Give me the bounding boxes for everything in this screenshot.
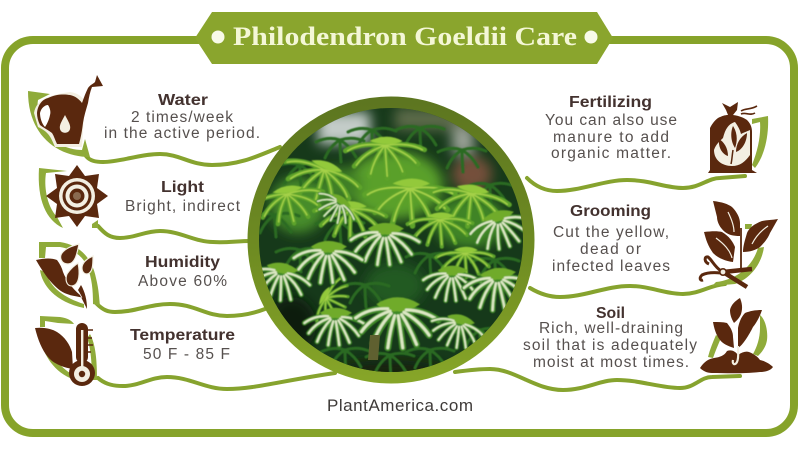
text: light: Light — [161, 179, 205, 196]
text: grooming — [552, 203, 670, 275]
ring — [254, 102, 528, 378]
text: light: Bright, indirect — [125, 198, 241, 215]
text: grooming: infected leaves — [552, 258, 670, 275]
text: grooming: Cut the yellow, — [553, 224, 669, 241]
text: water: 2 times/week — [131, 109, 233, 126]
connector: soil — [455, 369, 740, 390]
icon: thermometer and leaf — [35, 316, 97, 386]
text: humidity — [138, 254, 227, 290]
text: grooming: Grooming — [570, 203, 651, 220]
title banner — [195, 12, 613, 64]
icon: fertilizer bag — [708, 102, 768, 173]
text: humidity: Above 60% — [138, 273, 227, 290]
text: soil: Rich, well-draining — [539, 320, 683, 337]
connector: light — [98, 226, 250, 242]
text: fertilizing: organic matter. — [551, 145, 671, 162]
text: soil: Soil — [596, 305, 625, 322]
icon: sun — [39, 165, 108, 228]
text: soil: moist at most times. — [533, 354, 689, 371]
plant photo circle — [246, 102, 535, 388]
connector: humidity — [97, 304, 265, 316]
photo of plant — [259, 108, 523, 372]
text: fertilizing: manure to add — [553, 129, 669, 146]
text: water — [104, 92, 260, 142]
icon: watering can — [28, 75, 103, 157]
text: temperature — [130, 327, 235, 363]
icon: seedling in soil — [700, 298, 773, 373]
text: fertilizing — [545, 94, 677, 162]
text: soil — [523, 305, 697, 371]
text: grooming: dead or — [580, 241, 641, 258]
connector: grooming — [530, 284, 725, 297]
text: water: Water — [158, 92, 208, 109]
text: fertilizing: Fertilizing — [569, 94, 652, 111]
icon: leaves and shears — [700, 201, 778, 287]
text: temperature: Temperature — [130, 327, 235, 344]
title text: Philodendron Goeldii Care — [233, 22, 577, 51]
connector: temperature — [98, 373, 335, 389]
website credit: PlantAmerica.com — [327, 396, 473, 415]
connector: fertilizing — [527, 176, 745, 191]
text: light — [125, 179, 241, 215]
connector: water — [86, 147, 280, 165]
text: soil: soil that is adequately — [523, 337, 697, 354]
text: temperature: 50 F - 85 F — [143, 346, 230, 363]
text: water: in the active period. — [104, 125, 260, 142]
icon: humidity leaves and drops — [36, 242, 100, 309]
text: fertilizing: You can also use — [545, 112, 677, 129]
text: humidity: Humidity — [145, 254, 220, 271]
